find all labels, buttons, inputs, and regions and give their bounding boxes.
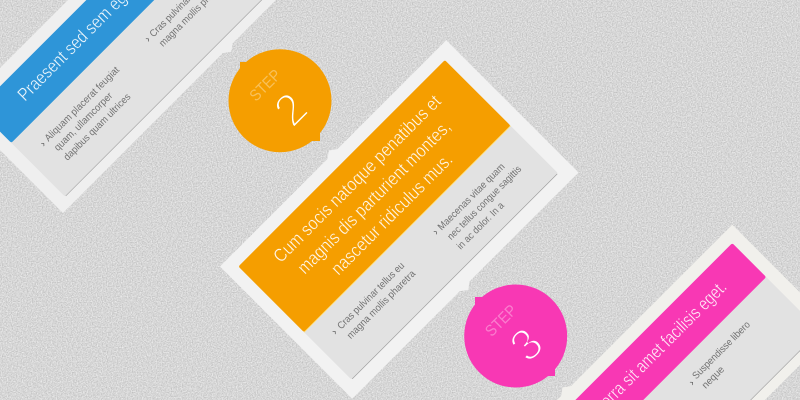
list text: Maecenas vitae quam bbox=[436, 161, 507, 233]
card 1 outer panel bbox=[0, 0, 293, 216]
card 2 left list: magna mollis pharetra bbox=[345, 268, 418, 341]
card 1 body bbox=[0, 0, 273, 197]
step label and number: 2 bbox=[264, 82, 317, 136]
step 2 badge bbox=[228, 49, 332, 152]
card 2 body bbox=[238, 60, 558, 380]
card 2 left list bbox=[330, 258, 418, 347]
card 2 outer panel bbox=[216, 37, 582, 400]
bullet: › bbox=[431, 227, 441, 238]
card 2 header band bbox=[238, 60, 511, 332]
card 2 heading: nascetur ridiculus mus. bbox=[326, 149, 457, 279]
card 3 outer panel bbox=[502, 221, 800, 400]
badge notches bbox=[475, 297, 555, 376]
card 1 left list bbox=[38, 65, 141, 168]
bullet: › bbox=[687, 378, 697, 388]
step label and number: STEP bbox=[247, 67, 285, 105]
card 1 left list: quam, ullamcorper bbox=[52, 90, 116, 154]
step label and number: STEP bbox=[482, 302, 521, 340]
step label and number bbox=[482, 302, 557, 376]
card 3 header band bbox=[524, 243, 766, 400]
list text: Aliquam placerat feugiat bbox=[43, 65, 122, 144]
bullet: › bbox=[330, 327, 340, 337]
badge circle bbox=[464, 284, 567, 388]
card 1 body bottom edge bbox=[65, 0, 272, 196]
step label and number: 3 bbox=[499, 318, 553, 371]
card 1 left list: dapibus quam ultrices bbox=[62, 92, 133, 163]
badge notches bbox=[240, 62, 320, 141]
card 3 right list bbox=[686, 319, 763, 396]
card 2 right list: nec tellus congue sagittis bbox=[446, 164, 524, 242]
card 2 body bottom edge bbox=[352, 174, 558, 379]
card 3 body bottom edge bbox=[612, 331, 800, 400]
card 1 header band bbox=[0, 0, 219, 143]
step label and number bbox=[247, 67, 321, 141]
step 3 badge bbox=[464, 284, 567, 388]
card 2 right list: in ac dolor. In a bbox=[455, 200, 507, 252]
card 3: pink bbox=[502, 221, 800, 400]
card 2 header highlight bbox=[304, 126, 511, 333]
bullet: › bbox=[143, 35, 153, 45]
card 2 heading: Cum socis natoque penatibus et bbox=[269, 90, 445, 266]
list text: Cras pulvinar tellus eu bbox=[336, 260, 407, 332]
card 2: orange bbox=[216, 37, 582, 400]
card 3 body bbox=[524, 243, 800, 400]
bullet: › bbox=[38, 139, 48, 149]
badge circle bbox=[228, 49, 332, 152]
card 1: blue bbox=[0, 0, 293, 216]
card 3 right list: neque bbox=[700, 364, 727, 391]
card 2 heading: magnis dis parturient montes, bbox=[293, 116, 455, 278]
list text: Suspendisse libero bbox=[691, 319, 753, 382]
